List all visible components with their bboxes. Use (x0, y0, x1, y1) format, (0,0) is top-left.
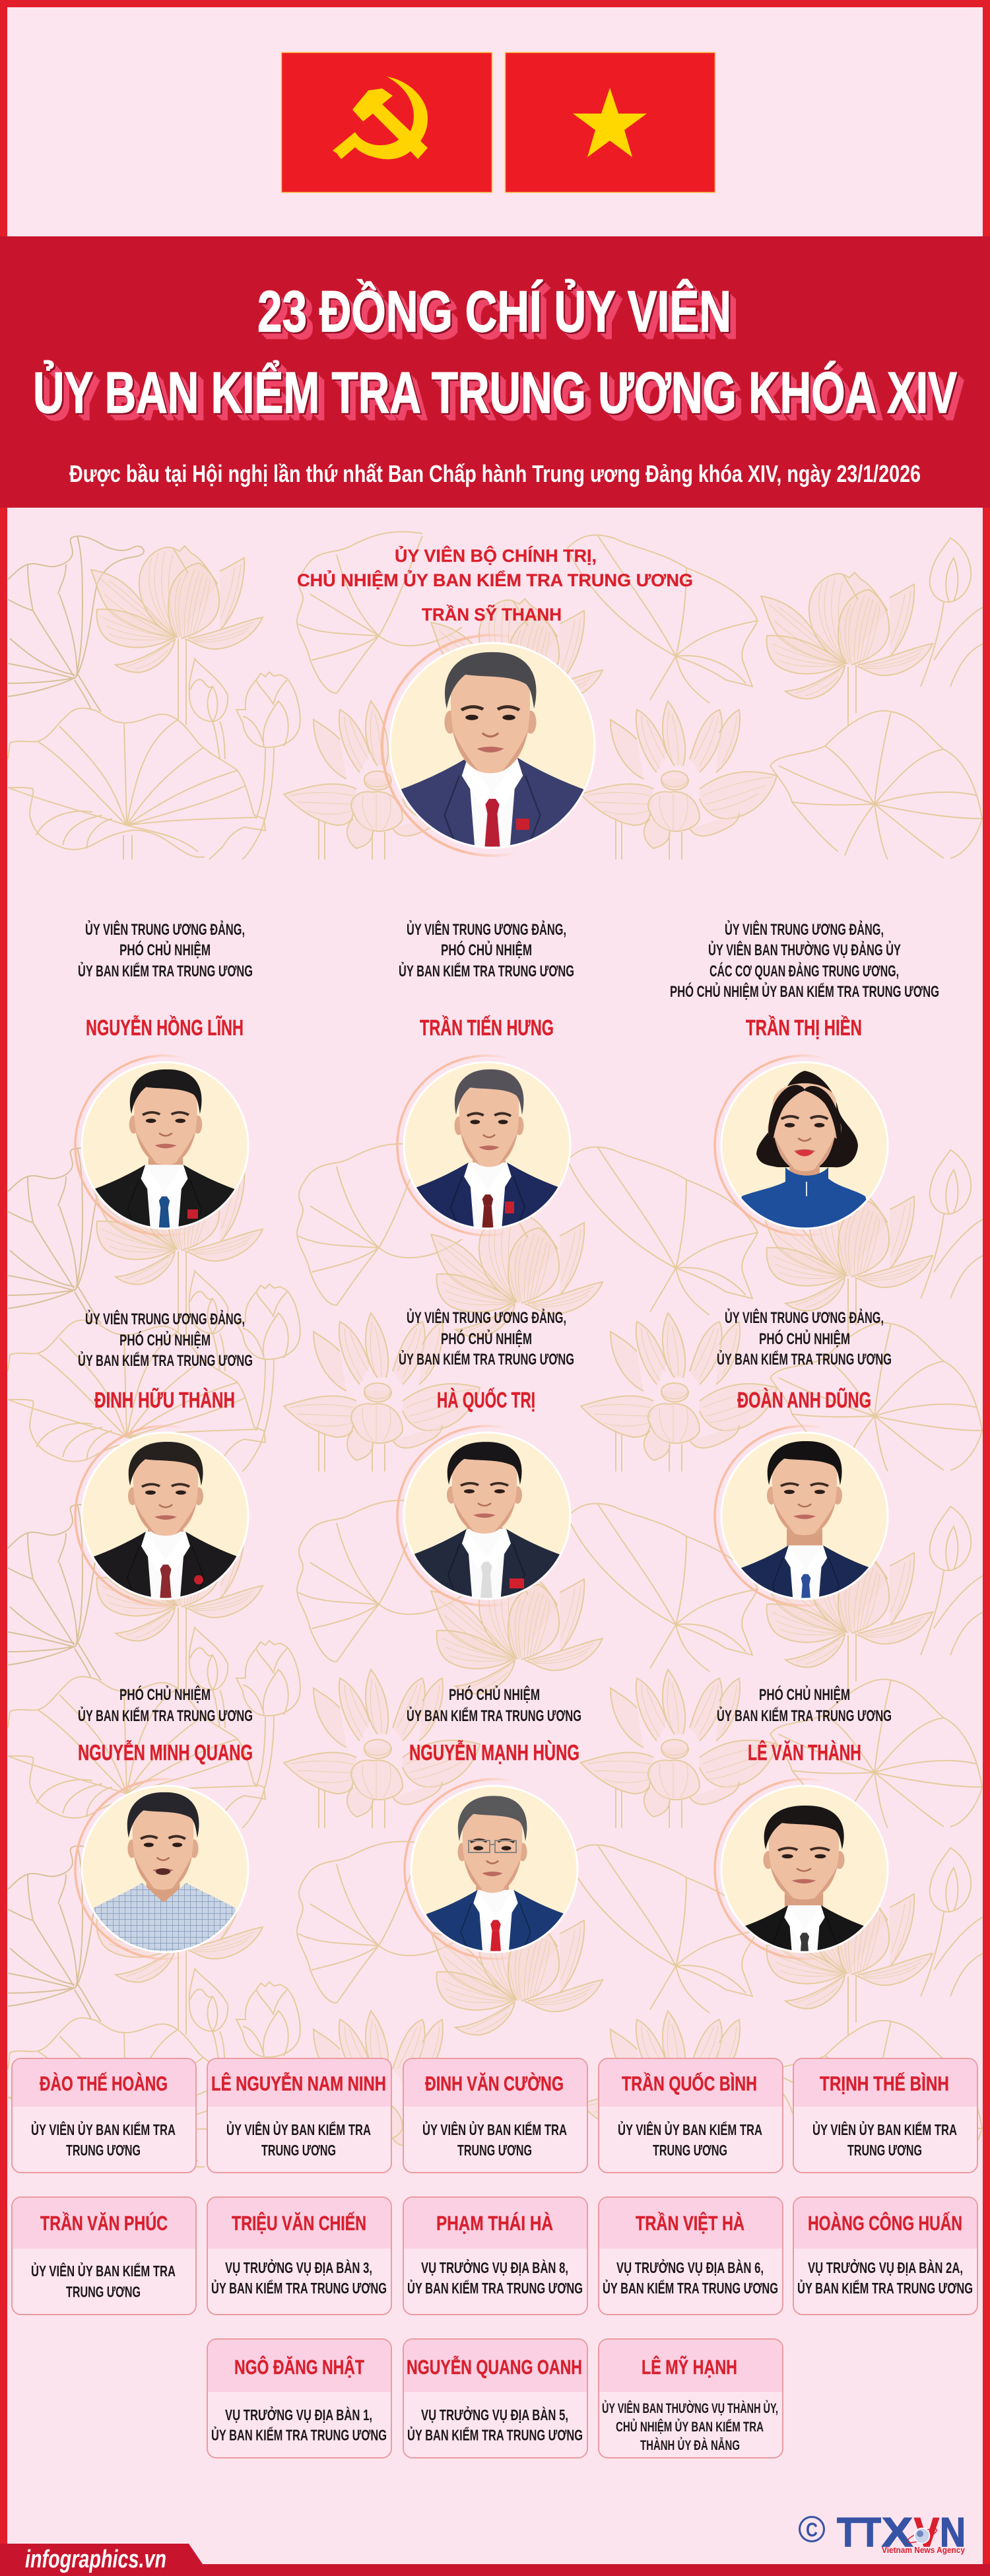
logo wordmark: X (882, 2510, 913, 2556)
name: NGUYỄN MẠNH HÙNG (409, 1740, 579, 1765)
role: VỤ TRƯỞNG VỤ ĐỊA BÀN 5, (421, 2405, 568, 2423)
role: ỦY BAN KIỂM TRA TRUNG ƯƠNG (399, 961, 574, 980)
role: ỦY BAN KIỂM TRA TRUNG ƯƠNG (603, 2278, 778, 2297)
panel: flags (7, 7, 983, 236)
name: TRẦN VĂN PHÚC (40, 2211, 168, 2235)
role: TRUNG ƯƠNG (66, 2142, 141, 2159)
role: ỦY BAN KIỂM TRA TRUNG ƯƠNG (717, 1706, 892, 1725)
role: VỤ TRƯỞNG VỤ ĐỊA BÀN 8, (421, 2258, 568, 2276)
card: Ngô Đăng Nhật (207, 2339, 391, 2458)
role: TRUNG ƯƠNG (653, 2142, 727, 2159)
card: Trần Quốc Bình (599, 2058, 783, 2173)
title: 23 ĐỒNG CHÍ ỦY VIÊN (257, 279, 731, 344)
card: Đào Thế Hoàng (12, 2058, 196, 2173)
portrait (396, 1425, 572, 1607)
portrait (715, 1056, 894, 1241)
name: TRẦN VIỆT HÀ (636, 2211, 744, 2235)
role: ỦY BAN KIỂM TRA TRUNG ƯƠNG (78, 1351, 253, 1370)
role: ỦY BAN KIỂM TRA TRUNG ƯƠNG (717, 1349, 892, 1369)
portrait (715, 1779, 894, 2010)
role: ỦY VIÊN ỦY BAN KIỂM TRA (31, 2261, 176, 2280)
name: TRẦN QUỐC BÌNH (622, 2072, 757, 2095)
role: ỦY VIÊN TRUNG ƯƠNG ĐẢNG, (725, 1308, 884, 1327)
role: PHÓ CHỦ NHIỆM (441, 940, 532, 959)
name: TRIỆU VĂN CHIẾN (232, 2211, 366, 2235)
name: NGÔ ĐĂNG NHẬT (234, 2355, 364, 2379)
role (211, 2405, 387, 2444)
card: Trần Việt Hà (599, 2197, 783, 2315)
panel: Trần Thị Hiền (670, 920, 939, 1241)
role: PHÓ CHỦ NHIỆM (449, 1685, 540, 1704)
role: ỦY BAN KIỂM TRA TRUNG ƯƠNG (78, 1706, 253, 1725)
role: PHÓ CHỦ NHIỆM (441, 1329, 532, 1348)
logo wordmark: V (914, 2510, 939, 2556)
role (78, 1685, 253, 1725)
chairman role: ỦY VIÊN BỘ CHÍNH TRỊ, (395, 545, 597, 566)
role: ỦY BAN KIỂM TRA TRUNG ƯƠNG (407, 1706, 581, 1725)
role: VỤ TRƯỞNG VỤ ĐỊA BÀN 3, (225, 2258, 372, 2276)
role: TRUNG ƯƠNG (66, 2283, 141, 2300)
name: LÊ NGUYỄN NAM NINH (211, 2072, 386, 2095)
role: VỤ TRƯỞNG VỤ ĐỊA BÀN 6, (616, 2258, 764, 2276)
panel: Đoàn Anh Dũng (713, 1308, 891, 1607)
role (797, 2258, 973, 2297)
role: ỦY VIÊN ỦY BAN KIỂM TRA (422, 2120, 567, 2138)
panel: Lê Văn Thành (713, 1685, 891, 1960)
role (31, 2120, 176, 2159)
panel: chairman (297, 545, 692, 857)
name: NGUYỄN QUANG OANH (407, 2356, 582, 2379)
role: ỦY VIÊN TRUNG ƯƠNG ĐẢNG, (407, 1308, 566, 1327)
role: ỦY VIÊN ỦY BAN KIỂM TRA (31, 2120, 176, 2138)
role (602, 2400, 778, 2453)
icon: copyright (800, 2517, 824, 2542)
role (407, 2258, 583, 2297)
logo: TTXVN Vietnam News Agency (800, 2510, 966, 2556)
role (618, 2120, 762, 2159)
role: TRUNG ƯƠNG (847, 2142, 922, 2159)
name: NGUYỄN HỒNG LĨNH (86, 1015, 244, 1040)
role: ỦY VIÊN BAN THƯỜNG VỤ ĐẢNG ỦY (708, 940, 901, 959)
portrait (74, 1054, 249, 1237)
name: PHẠM THÁI HÀ (436, 2212, 553, 2235)
role (717, 1685, 892, 1725)
panel: Nguyễn Mạnh Hùng (403, 1685, 581, 1960)
chairman role: CHỦ NHIỆM ỦY BAN KIỂM TRA TRUNG ƯƠNG (297, 569, 693, 590)
role: ỦY VIÊN TRUNG ƯƠNG ĐẢNG, (407, 920, 566, 939)
role (422, 2120, 567, 2159)
portrait (396, 1054, 572, 1237)
card: Trịnh Thế Bình (793, 2058, 977, 2173)
name: ĐÀO THẾ HOÀNG (40, 2072, 168, 2095)
name: LÊ VĂN THÀNH (748, 1740, 861, 1765)
panel: vice chairman Trần Tiến Hưng (396, 920, 574, 1237)
title (33, 279, 957, 425)
role: ỦY BAN KIỂM TRA TRUNG ƯƠNG (78, 961, 253, 980)
role (78, 1309, 253, 1370)
role (78, 920, 253, 980)
role (226, 2120, 371, 2159)
role: ỦY VIÊN ỦY BAN KIỂM TRA (226, 2120, 371, 2138)
portrait (75, 1779, 255, 1959)
name: NGUYỄN MINH QUANG (78, 1740, 253, 1765)
logo wordmark: TT (837, 2510, 881, 2556)
panel: title band (0, 236, 990, 508)
chairman role (297, 545, 693, 590)
role (407, 2405, 583, 2444)
role: VỤ TRƯỞNG VỤ ĐỊA BÀN 1, (225, 2405, 372, 2423)
role: ỦY VIÊN TRUNG ƯƠNG ĐẢNG, (85, 1309, 245, 1328)
name: LÊ MỸ HẠNH (642, 2355, 737, 2379)
role: PHÓ CHỦ NHIỆM (119, 1330, 211, 1349)
name: TRỊNH THẾ BÌNH (820, 2072, 949, 2095)
role (603, 2258, 778, 2297)
card: Phạm Thái Hà (403, 2197, 587, 2315)
portrait (403, 1778, 578, 1960)
icon: national flag with star (506, 53, 715, 193)
card: Triệu Văn Chiến (207, 2197, 391, 2315)
portrait (74, 1425, 249, 1607)
role (399, 920, 574, 980)
logo wordmark: N (940, 2510, 966, 2556)
role: PHÓ CHỦ NHIỆM (759, 1329, 850, 1348)
website label: infographics.vn (25, 2546, 166, 2573)
card: Lê Nguyễn Nam Ninh (207, 2058, 391, 2173)
name: TRẦN TIẾN HƯNG (420, 1015, 554, 1040)
panel: Hà Quốc Trị (396, 1308, 574, 1607)
role (670, 920, 939, 1001)
role: TRUNG ƯƠNG (261, 2142, 336, 2159)
name: ĐINH VĂN CƯỜNG (425, 2072, 564, 2095)
role: CÁC CƠ QUAN ĐẢNG TRUNG ƯƠNG, (710, 961, 899, 980)
role: ỦY BAN KIỂM TRA TRUNG ƯƠNG (211, 2278, 387, 2297)
agency name: Vietnam News Agency (882, 2545, 966, 2555)
name: ĐOÀN ANH DŨNG (737, 1388, 871, 1412)
role: ỦY VIÊN BAN THƯỜNG VỤ THÀNH ỦY, (602, 2400, 778, 2416)
icon: party flag with hammer and sickle (281, 53, 492, 193)
role: ỦY VIÊN TRUNG ƯƠNG ĐẢNG, (85, 920, 245, 939)
role (211, 2258, 387, 2297)
icon: globe with orbit (906, 2526, 939, 2546)
role: PHÓ CHỦ NHIỆM (119, 1685, 211, 1704)
panel: vice chairman Nguyễn Hồng Lĩnh (74, 920, 252, 1237)
role: ỦY BAN KIỂM TRA TRUNG ƯƠNG (407, 2425, 583, 2444)
role: ỦY VIÊN TRUNG ƯƠNG ĐẢNG, (725, 920, 884, 939)
role: TRUNG ƯƠNG (457, 2142, 532, 2159)
role (407, 1685, 581, 1725)
role (812, 2120, 957, 2159)
card: Trần Văn Phúc (12, 2197, 196, 2315)
role: ỦY BAN KIỂM TRA TRUNG ƯƠNG (211, 2425, 387, 2444)
name: TRẦN THỊ HIỀN (746, 1015, 862, 1040)
footer band (0, 2544, 990, 2576)
chairman name: TRẦN SỸ THANH (422, 604, 562, 625)
panel: Nguyễn Minh Quang (75, 1685, 255, 1959)
card: Hoàng Công Huấn (793, 2197, 977, 2315)
role: CHỦ NHIỆM ỦY BAN KIỂM TRA (616, 2418, 764, 2435)
role (399, 1308, 574, 1369)
portrait (713, 1425, 888, 1607)
card: Nguyễn Quang Oanh (403, 2339, 587, 2458)
name: HÀ QUỐC TRỊ (437, 1387, 535, 1412)
logo wordmark (837, 2510, 966, 2556)
name: ĐINH HỮU THÀNH (94, 1388, 235, 1412)
card: Đinh Văn Cường (403, 2058, 587, 2173)
role: PHÓ CHỦ NHIỆM (119, 940, 211, 959)
role: PHÓ CHỦ NHIỆM (759, 1685, 850, 1704)
card: Lê Mỹ Hạnh (599, 2339, 783, 2458)
role: ỦY BAN KIỂM TRA TRUNG ƯƠNG (399, 1349, 574, 1369)
role: ỦY VIÊN ỦY BAN KIỂM TRA (618, 2120, 762, 2138)
panel: Đinh Hữu Thành (74, 1310, 252, 1607)
role: ỦY BAN KIỂM TRA TRUNG ƯƠNG (407, 2278, 583, 2297)
role (31, 2261, 176, 2300)
role (717, 1308, 892, 1369)
role: THÀNH ỦY ĐÀ NẴNG (640, 2437, 740, 2453)
icon: copyright: C (806, 2519, 818, 2541)
portrait: Trần Sỹ Thanh (381, 634, 595, 857)
